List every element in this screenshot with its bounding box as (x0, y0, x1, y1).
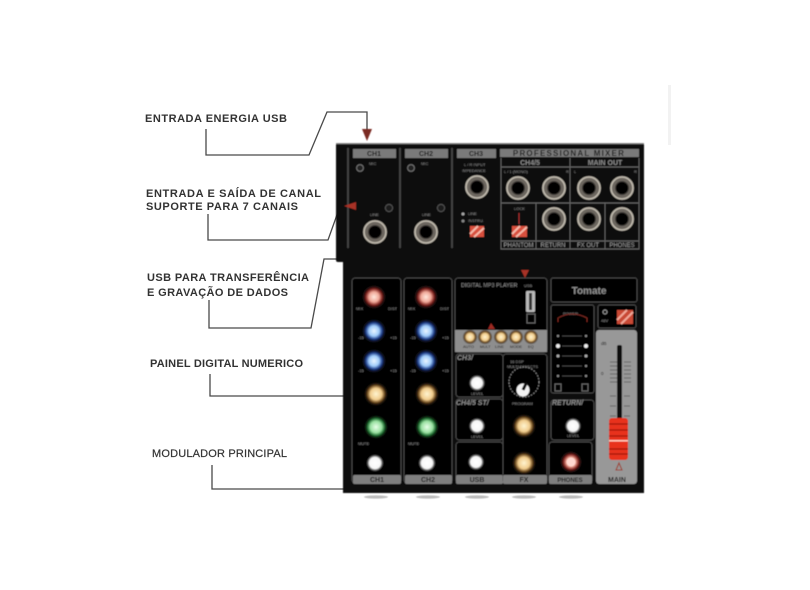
leader line: channel input (208, 212, 338, 240)
power meter (551, 305, 594, 393)
digital MP3 player: MODE (510, 344, 522, 349)
mixer device (336, 129, 644, 499)
digital MP3 player: DIGITAL MP3 PLAYER (461, 283, 517, 289)
mixer front panel (343, 129, 644, 493)
main fader: dB (601, 341, 607, 346)
CH3 knob section: LEVEL (471, 391, 484, 396)
channel strip 2: CH2 (421, 477, 435, 484)
channel strip 2: +15 (442, 368, 450, 373)
label: painel digital numerico: PAINEL DIGITAL NUMERICO (150, 358, 303, 370)
red pointer marks (344, 129, 529, 278)
channel strip 2: MUTE (408, 441, 420, 446)
mixer rear panel (336, 143, 644, 262)
label: modulador principal: MODULADOR PRINCIPAL (152, 448, 287, 460)
phones section: PHONES (557, 478, 583, 484)
label: USB para transferência: USB PARA TRANSFERÊNCIA (147, 271, 309, 284)
channel strip 1 (352, 278, 401, 484)
return section (551, 400, 594, 440)
main fader (596, 330, 637, 484)
label: USB para transferência (147, 259, 525, 328)
professional mixer section: RETURN (540, 243, 566, 249)
jacks row 2 (543, 208, 633, 230)
channel strip 2: DIST (440, 306, 450, 311)
program knob (516, 382, 530, 396)
channel 2 input: LINE (422, 212, 431, 217)
label: USB para transferência: E GRAVAÇÃO DE DADOS (147, 286, 288, 299)
professional mixer section: CH4/5 (520, 160, 540, 167)
leader line: USB transfer (209, 259, 525, 328)
channel 3 input (457, 149, 496, 237)
channel 2 input (405, 149, 448, 243)
digital MP3 player (455, 278, 547, 352)
channel 1 input: MIC (369, 161, 376, 166)
label: entrada energia USB (145, 112, 367, 155)
channel strip 1: +15 (390, 368, 398, 373)
channel 3 input: CH3 (469, 151, 483, 158)
label: entrada e saída de canal: ENTRADA E SAÍDA DE CANAL (146, 187, 321, 200)
label: entrada e saída de canal (146, 187, 338, 240)
grey button strip (455, 330, 547, 352)
return section: RETURN/ (552, 400, 584, 407)
CH3 knob section (456, 354, 503, 397)
channel 3 input: LINE (468, 211, 477, 216)
digital MP3 player: AUTO (463, 344, 474, 349)
channel 1 input (353, 149, 396, 243)
channel strip 2: +15 (442, 335, 450, 340)
professional mixer section: L (574, 169, 577, 174)
channel 1 input: LINE (370, 212, 379, 217)
FX section: PROGRAM (512, 401, 533, 406)
brand plate: Tomate (572, 286, 607, 297)
power switch: 48V (601, 318, 608, 323)
channel strip 1: +15 (390, 335, 398, 340)
CH4/5 knob section: LEVEL (471, 434, 484, 439)
CH4/5 knob section: CH4/5 ST/ (456, 400, 490, 407)
main fader: MAIN (608, 477, 626, 484)
channel strip 1: -15 (358, 335, 365, 340)
label: entrada energia USB: ENTRADA ENERGIA USB (145, 113, 287, 125)
label: painel digital numerico (150, 358, 345, 396)
channel strip 1: -15 (358, 368, 365, 373)
channel strip 1: DIST (388, 306, 398, 311)
FX section: MULTI EFFECTS (507, 364, 538, 369)
return section: LEVEL (567, 433, 580, 438)
USB knob section: USB (470, 477, 484, 484)
digital MP3 player: LINE (495, 344, 504, 349)
channel strip 1: MUTE (358, 441, 370, 446)
digital MP3 player: USB (524, 283, 533, 288)
leader line: digital panel (210, 374, 345, 396)
FX section: 16 DSP (510, 359, 524, 364)
professional mixer section: FX OUT (577, 243, 599, 249)
main fader: 0 (601, 371, 604, 376)
channel 1 input: CH1 (367, 151, 381, 158)
professional mixer section: MAIN OUT (588, 160, 623, 167)
professional mixer section: PHANTOM (504, 243, 533, 249)
USB slot (526, 291, 535, 312)
professional mixer section: L / 1 (MONO) (504, 169, 529, 174)
label: modulador principal (152, 448, 345, 489)
leader line: main modulator (212, 465, 345, 489)
professional mixer section (500, 149, 639, 249)
fader slot (617, 345, 622, 453)
fader cap (609, 418, 628, 460)
power meter: POWER (563, 311, 578, 316)
label: entrada e saída de canal: SUPORTE PARA 7 CANAIS (146, 201, 298, 213)
channel 2 input: CH2 (419, 151, 433, 158)
digital MP3 player: MULT (480, 344, 491, 349)
channel strip 2: MIX (408, 306, 415, 311)
channel 3 input: L / R INPUT (464, 162, 486, 167)
phantom switch: LOCK (514, 206, 525, 211)
FX section: FX (520, 477, 529, 484)
brand plate (551, 278, 637, 302)
fader scale ticks (610, 362, 631, 416)
digital MP3 player: EQ (528, 344, 534, 349)
professional mixer section: PROFESSIONAL MIXER (513, 149, 625, 158)
professional mixer section: R (566, 169, 569, 174)
channel 3 input: INSTRU. (468, 218, 484, 223)
channel strip 1: CH1 (370, 477, 384, 484)
channel strip 2: -15 (410, 368, 417, 373)
channel strip 1: MIX (356, 306, 363, 311)
professional mixer section: R (634, 169, 637, 174)
power switch (598, 305, 636, 328)
CH3 knob section: CH3/ (457, 355, 474, 362)
channel 3 input: IMPEDANCE (462, 168, 486, 173)
professional mixer section: PHONES (609, 243, 635, 249)
channel strip 2 (404, 278, 452, 484)
phones section (549, 442, 592, 484)
channel strip 2: -15 (410, 335, 417, 340)
CH4/5 knob section (456, 399, 503, 440)
FX section (503, 354, 547, 484)
USB knob section (456, 442, 503, 484)
channel 2 input: MIC (421, 161, 428, 166)
leader line: USB power (206, 112, 367, 155)
jacks row 1 (507, 177, 633, 199)
